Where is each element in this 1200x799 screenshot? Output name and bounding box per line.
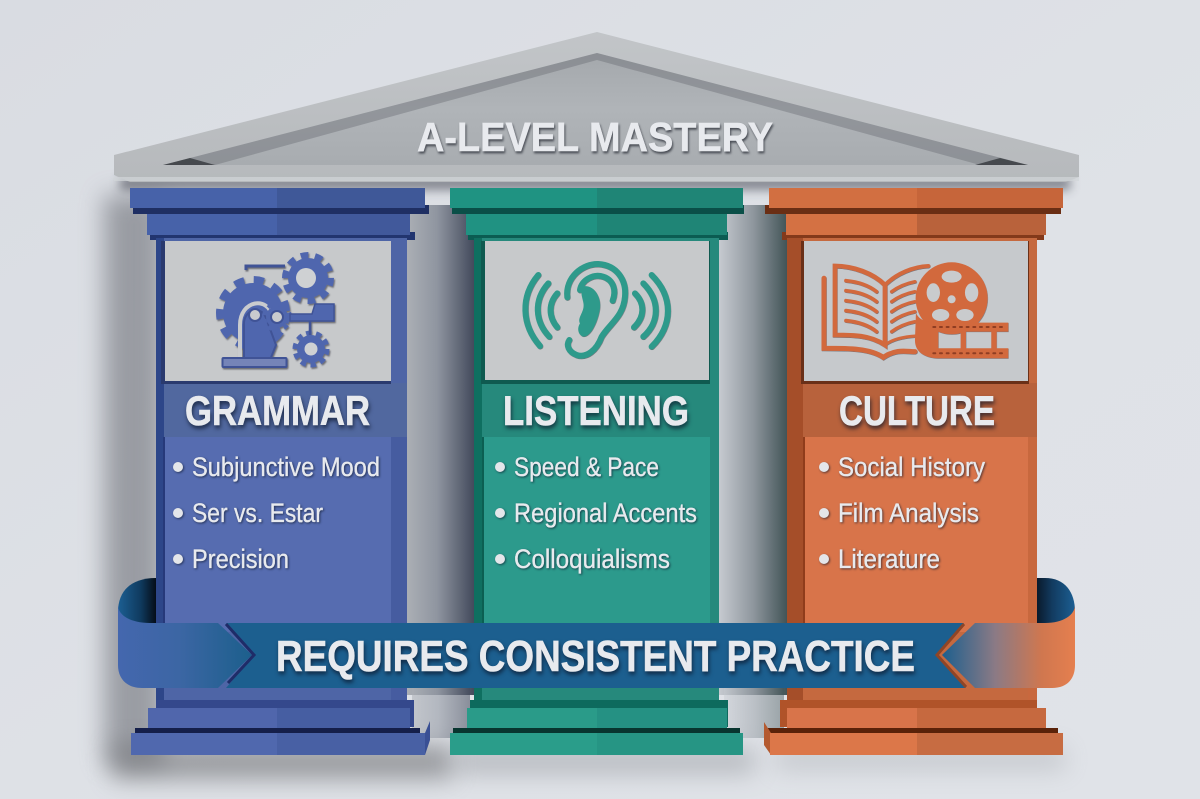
ribbon banner <box>118 578 1075 688</box>
icon: open book and film reel <box>824 262 1008 358</box>
listening list: Regional Accents <box>514 498 697 528</box>
icon: gears and machine <box>220 256 334 367</box>
ribbon text: REQUIRES CONSISTENT PRACTICE <box>276 632 915 681</box>
grammar column <box>156 238 407 710</box>
listening column <box>474 238 719 710</box>
listening icon panel <box>481 241 710 384</box>
culture capital <box>765 188 1063 240</box>
ribbon left tail <box>118 605 252 688</box>
ribbon right tail <box>942 605 1075 688</box>
ribbon right curl <box>1037 578 1075 640</box>
pillar: culture <box>764 188 1063 755</box>
culture list: Literature <box>838 544 940 574</box>
grammar list: Subjunctive Mood <box>192 452 380 482</box>
pediment roof <box>114 32 1079 182</box>
icon: ear with sound waves <box>525 264 668 356</box>
tympanum <box>163 53 1028 165</box>
roof slab <box>114 32 1079 182</box>
ribbon main band <box>226 623 966 688</box>
culture column <box>787 238 1037 710</box>
grammar heading: GRAMMAR <box>185 387 370 434</box>
culture list: Film Analysis <box>838 498 979 528</box>
culture list <box>803 437 1028 632</box>
culture icon panel <box>801 241 1029 384</box>
grammar list: Ser vs. Estar <box>192 498 323 528</box>
grammar icon panel <box>161 241 391 384</box>
cast shadows on wall <box>104 176 1070 779</box>
listening base <box>450 700 743 755</box>
listening list: Speed & Pace <box>514 452 659 482</box>
grammar list: Precision <box>192 544 289 574</box>
listening heading: LISTENING <box>503 387 689 434</box>
grammar base <box>131 700 430 755</box>
culture heading: CULTURE <box>839 387 995 434</box>
grammar capital <box>130 188 429 240</box>
listening capital <box>450 188 744 240</box>
culture list: Social History <box>838 452 985 482</box>
ribbon left curl <box>118 578 156 640</box>
pillar: grammar <box>130 188 430 755</box>
pillar: listening <box>450 188 744 755</box>
title: A-LEVEL MASTERY <box>417 114 773 160</box>
culture base <box>764 700 1063 755</box>
listening list <box>482 437 710 632</box>
listening list: Colloquialisms <box>514 544 670 574</box>
grammar list <box>163 437 391 632</box>
